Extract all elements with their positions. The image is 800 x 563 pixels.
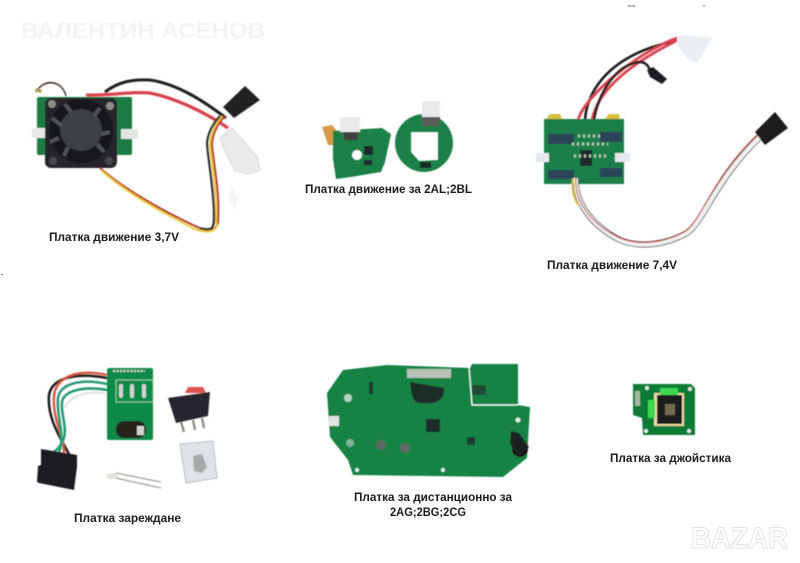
label: remote control board [354,490,512,519]
photo: 2AL/2BL boards [322,101,453,179]
label: remote control board: Платка за дистанционно за [354,490,512,504]
label: remote control board: 2AG;2BG;2CG [390,505,466,519]
watermark: author name: ВАЛЕНТИН АСЕНОВ [21,18,265,43]
small stray mark [1,274,3,275]
label: 3.7V board: Платка движение 3,7V [49,230,179,244]
label: charging board: Платка зареждане [74,511,181,525]
photo: remote control board [327,364,530,477]
photo: joystick board [633,384,695,435]
photo: 3.7V drive board with fan [32,80,260,232]
label: 2AL;2BL board: Платка движение за 2AL;2BL [305,182,472,196]
label: joystick board: Платка за джойстика [610,451,731,465]
label: 7.4V board: Платка движение 7,4V [547,258,677,272]
watermark: Bazar logo: BAZAR [691,522,788,555]
photo: 7.4V drive board [536,6,788,244]
photo: charging board set [37,368,217,490]
